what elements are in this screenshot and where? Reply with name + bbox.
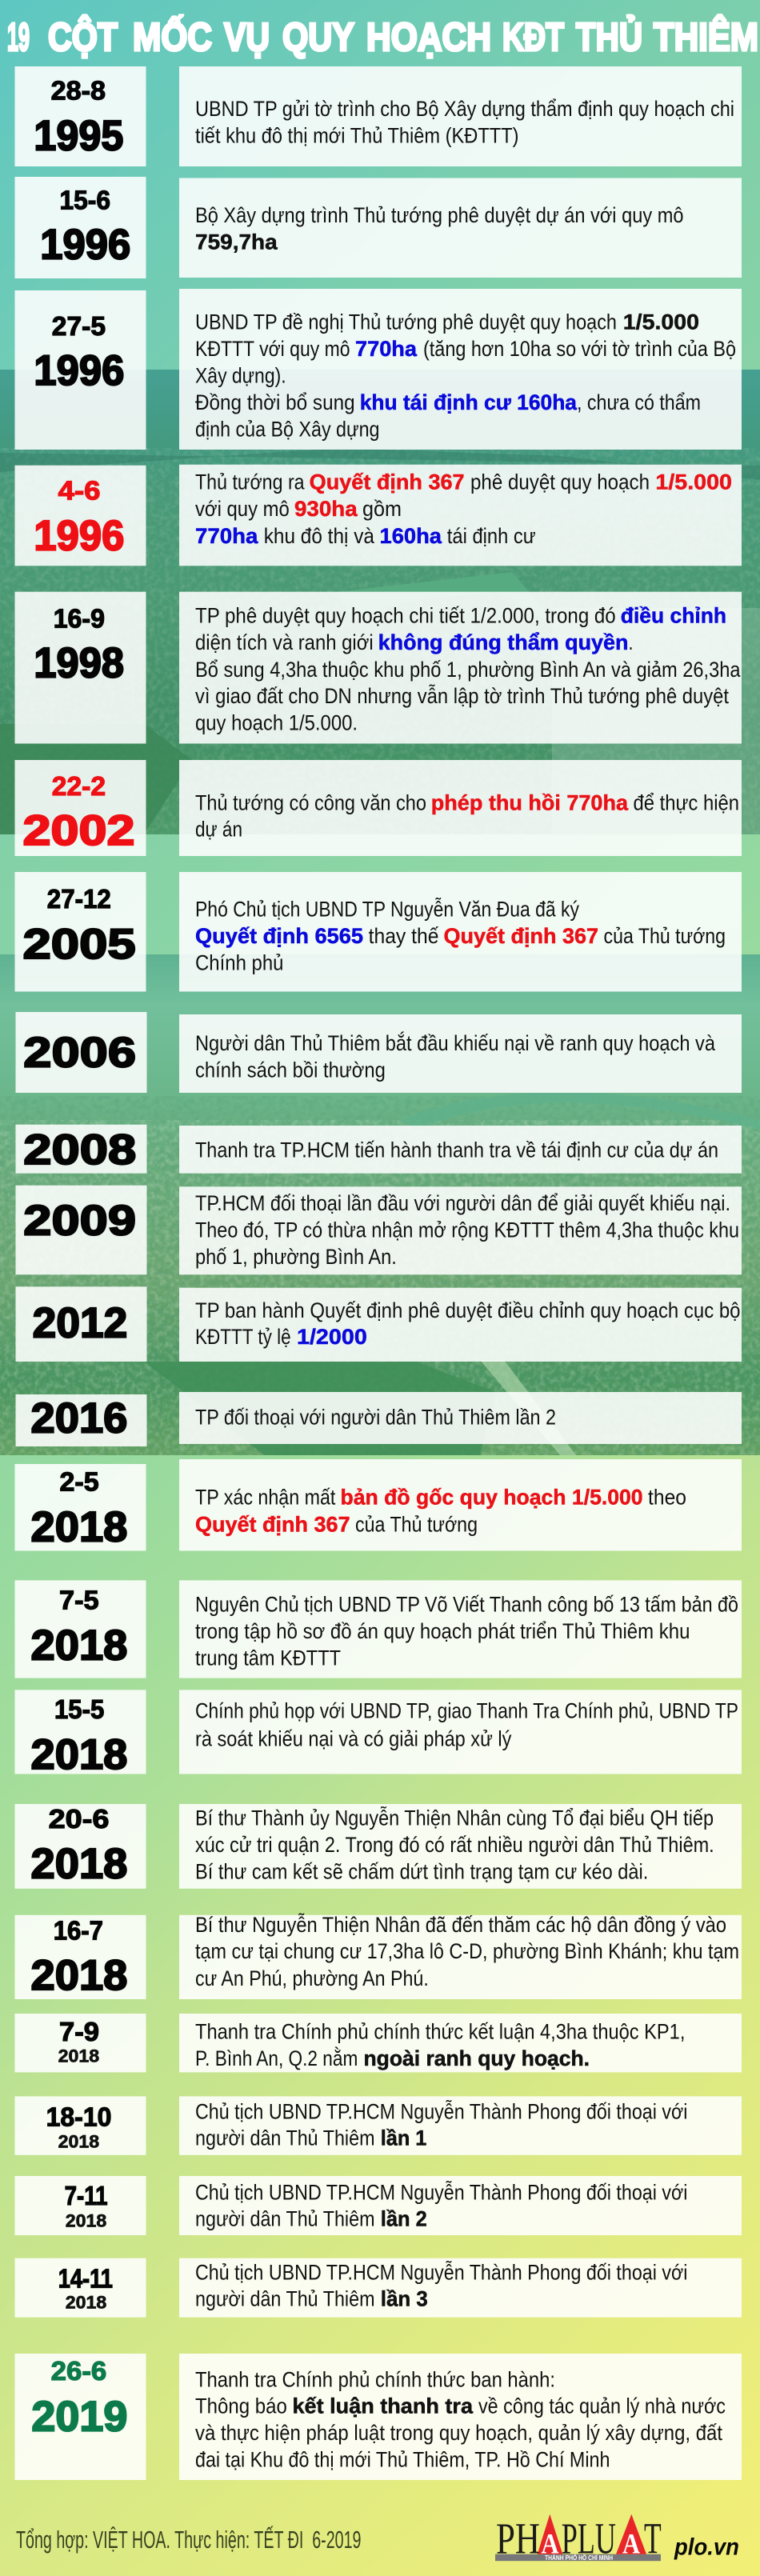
description panel: ngoài ranh quy hoạch. — [363, 2046, 590, 2070]
description panel: người dân Thủ Thiêm — [195, 2206, 374, 2230]
date box — [14, 2258, 146, 2318]
date box — [14, 177, 146, 278]
logo: Pháp Luật TP.HCM — [495, 2514, 662, 2563]
date box: 2-5 — [59, 1467, 99, 1496]
description panel: đai tại Khu đô thị mới Thủ Thiêm, TP. Hồ Chí Minh — [195, 2447, 610, 2471]
date box: 2018 — [30, 1504, 127, 1550]
logo: Pháp Luật TP.HCM: T — [644, 2514, 662, 2563]
date box: 2006 — [23, 1029, 136, 1077]
date box — [14, 2176, 146, 2235]
description panel — [179, 1392, 742, 1444]
description panel: Thủ tướng ra — [195, 470, 305, 494]
description panel: khu tái định cư 160ha — [360, 390, 577, 414]
milestone 18: 7-9-2018 — [14, 2014, 742, 2072]
description panel — [179, 178, 742, 278]
milestone 3: 27-5-1996 — [14, 289, 742, 450]
date box — [14, 466, 146, 566]
description panel — [179, 2014, 742, 2072]
description panel: P. Bình An, Q.2 nằm — [195, 2046, 358, 2070]
date box — [16, 1286, 147, 1362]
description panel — [179, 1913, 742, 1999]
description panel — [179, 66, 742, 166]
milestone 8: 2006 — [16, 1012, 742, 1093]
date box: 1998 — [34, 640, 124, 686]
description panel: lần 1 — [381, 2126, 426, 2150]
milestone 4: 4-6-1996 — [14, 465, 742, 566]
description panel: Quyết định 6565 — [195, 924, 363, 948]
description panel: của Thủ tướng — [603, 924, 726, 948]
date box: 2018 — [66, 2292, 106, 2312]
description panel: Chủ tịch UBND TP.HCM Nguyễn Thành Phong đối thoại với — [195, 2260, 687, 2284]
description panel: Chủ tịch UBND TP.HCM Nguyễn Thành Phong đối thoại với — [195, 2180, 687, 2204]
description panel: 759,7ha — [195, 230, 278, 254]
title: VỤ — [224, 16, 270, 59]
description panel: trung tâm KĐTTT — [195, 1646, 341, 1670]
title: MỐC — [133, 15, 212, 59]
description panel: gồm — [362, 497, 402, 521]
date box — [14, 2354, 146, 2480]
milestone 5: 16-9-1998 — [14, 592, 742, 744]
date box: 1995 — [34, 113, 123, 160]
description panel: phép thu hồi 770ha — [431, 790, 628, 814]
description panel — [179, 1459, 742, 1550]
description panel: cư An Phú, phường An Phú. — [195, 1966, 429, 1990]
milestone 6: 22-2-2002 — [14, 760, 742, 856]
logo: Pháp Luật TP.HCM: A — [541, 2528, 558, 2560]
date box: 15-6 — [59, 186, 110, 215]
description panel: với quy mô — [195, 497, 290, 521]
description panel: Đồng thời bổ sung — [195, 390, 355, 414]
date box: 4-6 — [58, 475, 101, 505]
description panel: tiết khu đô thị mới Thủ Thiêm (KĐTTT) — [195, 123, 518, 147]
description panel: 1/2000 — [297, 1325, 367, 1349]
date box: 2018 — [66, 2210, 106, 2230]
description panel: Quyết định 367 — [310, 470, 465, 494]
description panel: Bí thư cam kết sẽ chấm dứt tình trạng tạm cư kéo dài. — [195, 1860, 648, 1884]
date box: 20-6 — [49, 1804, 109, 1834]
logo: Pháp Luật TP.HCM: THÀNH PHỐ HỒ CHÍ MINH — [545, 2553, 613, 2562]
date box — [14, 1804, 146, 1889]
date box: 16-9 — [54, 603, 105, 634]
description panel: KĐTTT tỷ lệ — [195, 1325, 291, 1349]
description panel: về công tác quản lý nhà nước — [478, 2394, 726, 2418]
milestone 21: 14-11-2018 — [14, 2258, 742, 2318]
date box — [14, 2014, 146, 2072]
description panel — [179, 2354, 742, 2480]
description panel: diện tích và ranh giới — [195, 630, 374, 654]
date box — [14, 872, 146, 992]
description panel — [179, 1126, 742, 1174]
date box — [14, 760, 146, 856]
description panel: để thực hiện — [634, 790, 739, 814]
description panel — [179, 872, 742, 992]
title: CỘT — [48, 15, 118, 59]
description panel: TP xác nhận mất — [195, 1486, 336, 1510]
description panel — [179, 1580, 742, 1678]
description panel: bản đồ gốc quy hoạch 1/5.000 — [341, 1486, 643, 1510]
description panel: dự án — [195, 818, 242, 842]
date box — [14, 1580, 146, 1678]
date box — [16, 1012, 147, 1093]
description panel: của Thủ tướng — [355, 1512, 478, 1536]
background photo: aerial view of new urban area — [0, 954, 760, 1455]
date box: 26-6 — [51, 2356, 106, 2386]
description panel — [179, 760, 742, 856]
date box: 27-5 — [52, 311, 106, 341]
date box: 2018 — [30, 1952, 127, 1999]
date box — [14, 1915, 146, 1999]
milestone 11: 2012 — [16, 1286, 742, 1362]
description panel: Thanh tra Chính phủ chính thức kết luận 4,3ha thuộc KP1, — [195, 2019, 685, 2043]
logo: Pháp Luật TP.HCM: A — [622, 2528, 640, 2560]
milestone 14: 7-5-2018 — [14, 1580, 742, 1678]
description panel: không đúng thẩm quyền — [378, 630, 629, 654]
description panel: chính sách bồi thường — [195, 1058, 386, 1082]
description panel: Bộ Xây dựng trình Thủ tướng phê duyệt dự án với quy mô — [195, 203, 683, 227]
description panel: UBND TP đề nghị Thủ tướng phê duyệt quy hoạch — [195, 310, 617, 334]
description panel: Thủ tướng có công văn cho — [195, 790, 426, 814]
date box: 27-12 — [47, 884, 111, 914]
description panel: phố 1, phường Bình An. — [195, 1245, 397, 1269]
description panel: 160ha — [379, 524, 442, 548]
description panel: Thông báo — [195, 2394, 287, 2418]
title: THỦ — [576, 15, 642, 59]
description panel — [179, 1288, 742, 1362]
description panel — [179, 1186, 742, 1274]
date box: 2018 — [58, 2131, 99, 2152]
date box: 2002 — [22, 807, 134, 854]
milestone 17: 16-7-2018 — [14, 1913, 742, 1999]
description panel: thay thế — [369, 924, 439, 948]
description panel — [179, 2096, 742, 2155]
date box: 2018 — [30, 1622, 127, 1669]
description panel: trong tập hồ sơ đồ án quy hoạch phát triển Thủ Thiêm khu — [195, 1619, 690, 1643]
date box: 2016 — [30, 1395, 127, 1442]
description panel: . — [629, 630, 634, 654]
description panel: điều chỉnh — [621, 604, 726, 628]
date box: 2018 — [58, 2046, 99, 2066]
description panel — [179, 289, 742, 450]
description panel: TP đối thoại với người dân Thủ Thiêm lần 2 — [195, 1405, 556, 1429]
date box — [16, 1125, 147, 1174]
date box — [16, 1394, 147, 1446]
description panel: 930ha — [294, 497, 358, 521]
description panel: người dân Thủ Thiêm — [195, 2287, 374, 2311]
description panel: 1/5.000 — [655, 470, 732, 494]
date box: 16-7 — [54, 1915, 103, 1946]
date box: 22-2 — [52, 771, 106, 801]
date box: 15-5 — [54, 1694, 104, 1724]
date box: 2018 — [30, 1731, 127, 1778]
description panel: định của Bộ Xây dựng — [195, 418, 379, 442]
description panel: lần 2 — [381, 2206, 427, 2230]
date box: 2018 — [30, 1841, 127, 1888]
description panel — [179, 2176, 742, 2235]
title: QUY — [282, 16, 354, 59]
title — [7, 15, 758, 59]
milestone 16: 20-6-2018 — [14, 1804, 742, 1889]
logo: plo.vn: plo.vn — [674, 2534, 739, 2560]
milestone 20: 7-11-2018 — [14, 2176, 742, 2235]
date box: 2008 — [23, 1126, 136, 1174]
description panel: TP phê duyệt quy hoạch chi tiết 1/2.000, trong đó — [195, 604, 616, 628]
date box: 28-8 — [51, 76, 106, 106]
description panel — [179, 1804, 742, 1889]
date box: 2012 — [33, 1300, 127, 1347]
milestone 2: 15-6-1996 — [14, 177, 742, 278]
description panel — [179, 2258, 742, 2318]
description panel: Chủ tịch UBND TP.HCM Nguyễn Thành Phong đối thoại với — [195, 2099, 687, 2123]
date box: 7-11 — [65, 2181, 107, 2210]
description panel: tái định cư — [447, 524, 536, 548]
description panel: theo — [648, 1486, 686, 1510]
description panel: khu đô thị và — [264, 524, 374, 548]
title: 19 — [7, 16, 30, 59]
milestone 10: 2009 — [16, 1186, 742, 1274]
title: KĐT — [502, 16, 564, 59]
description panel: Chính phủ — [195, 951, 283, 975]
description panel: , chưa có thẩm — [577, 390, 701, 414]
description panel: quy hoạch 1/5.000. — [195, 711, 358, 735]
date box: 7-9 — [59, 2017, 99, 2046]
title: HOẠCH — [366, 16, 491, 59]
description panel: Xây dựng). — [195, 364, 286, 388]
date box — [14, 66, 146, 166]
description panel: KĐTTT với quy mô — [195, 337, 350, 361]
milestone 13: 2-5-2018 — [14, 1459, 742, 1550]
footer credit: Tổng hợp: VIỆT HOA. Thực hiện: TẾT ĐI 6-2019 — [16, 2526, 362, 2554]
milestone 7: 27-12-2005 — [14, 872, 742, 992]
date box — [14, 2096, 146, 2155]
description panel: 770ha — [195, 524, 258, 548]
milestone 1: 28-8-1995 — [14, 66, 742, 166]
description panel: người dân Thủ Thiêm — [195, 2126, 374, 2150]
date box — [14, 290, 146, 450]
background photo: aerial view of Thu Thiem river — [0, 370, 760, 834]
description panel — [179, 1690, 742, 1774]
date box: 7-5 — [59, 1586, 99, 1614]
milestone 9: 2008 — [16, 1125, 742, 1174]
description panel: Quyết định 367 — [195, 1512, 350, 1536]
date box: 1996 — [34, 512, 124, 559]
description panel: phê duyệt quy hoạch — [470, 470, 650, 494]
description panel: 1/5.000 — [623, 310, 699, 334]
date box: 1996 — [40, 222, 130, 269]
description panel: 770ha — [355, 337, 417, 361]
description panel — [179, 592, 742, 744]
description panel: Phó Chủ tịch UBND TP Nguyễn Văn Đua đã ký — [195, 897, 580, 921]
description panel — [179, 1014, 742, 1093]
description panel: lần 3 — [381, 2287, 428, 2311]
date box — [14, 1690, 146, 1778]
milestone 15: 15-5-2018 — [14, 1690, 742, 1778]
date box: 18-10 — [46, 2102, 111, 2132]
date box: 14-11 — [58, 2263, 113, 2293]
date box: 2005 — [22, 921, 136, 968]
milestone 19: 18-10-2018 — [14, 2096, 742, 2155]
description panel: rà soát khiếu nại và có giải pháp xử lý — [195, 1726, 512, 1750]
date box: 1996 — [34, 347, 124, 394]
date box — [14, 1464, 146, 1550]
milestone 12: 2016 — [16, 1392, 742, 1446]
date box — [16, 1186, 147, 1274]
description panel: kết luận thanh tra — [293, 2394, 473, 2418]
logo: Pháp Luật TP.HCM: PLU — [562, 2514, 616, 2563]
logo: Pháp Luật TP.HCM: PH — [496, 2514, 540, 2563]
description panel: Thanh tra Chính phủ chính thức ban hành: — [195, 2367, 555, 2391]
milestone 22: 26-6-2019 — [14, 2354, 742, 2480]
date box — [14, 592, 146, 744]
description panel: Quyết định 367 — [443, 924, 598, 948]
date box: 2019 — [31, 2393, 127, 2440]
description panel — [179, 465, 742, 566]
date box: 2009 — [23, 1197, 136, 1244]
